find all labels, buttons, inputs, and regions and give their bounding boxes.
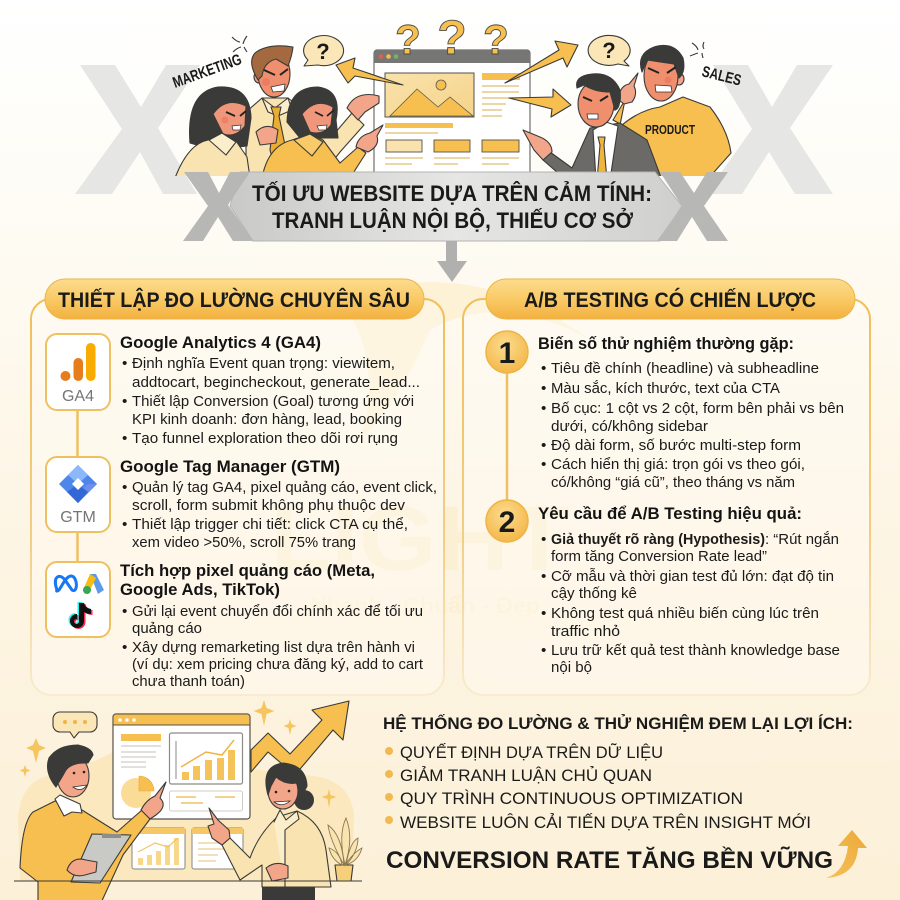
question marks: ?	[395, 16, 421, 63]
heading pill	[486, 279, 855, 319]
icon: dark X right	[657, 172, 728, 241]
benefit bullets: QUYẾT ĐỊNH DỰA TRÊN DỮ LIỆU	[400, 743, 663, 762]
block: GA4 text: •	[122, 393, 127, 410]
person: product man: PRODUCT	[645, 122, 695, 137]
small chart card	[132, 828, 185, 869]
panel frame	[31, 299, 444, 695]
block: GTM text: •	[122, 479, 127, 496]
block: GA4 text: Tạo funnel exploration theo dõi rơi rụng	[132, 430, 398, 447]
browser window	[374, 50, 530, 185]
illustration: team reviewing data	[14, 700, 362, 900]
icon: GTM	[46, 457, 110, 532]
person: product man	[613, 45, 731, 180]
question marks: ?	[437, 12, 467, 65]
block: requirements: Không test quá nhiều biến cùng lúc trên	[551, 605, 819, 622]
small list card	[192, 828, 243, 869]
person: woman presenter	[208, 763, 331, 900]
icon: GA4: GA4	[62, 388, 94, 405]
block: pixel text: quảng cáo	[132, 620, 202, 637]
person: woman left	[175, 87, 251, 178]
block: variables: Biến số thử nghiệm thường gặp:	[538, 334, 794, 353]
block: GA4 text: Google Analytics 4 (GA4)	[120, 333, 321, 352]
sparkles	[20, 700, 336, 808]
block: variables: •	[541, 456, 546, 473]
person: woman middle	[262, 87, 383, 178]
block: variables: Độ dài form, số bước multi-step form	[551, 437, 801, 454]
block: GTM text: Quản lý tag GA4, pixel quảng cáo, event click,	[132, 479, 437, 496]
heading text: THIẾT LẬP ĐO LƯỜNG CHUYÊN SÂU	[58, 288, 410, 312]
connector line	[506, 372, 508, 500]
block: pixel text: (ví dụ: xem pricing chưa đăng ký, add to cart	[132, 656, 424, 673]
floor line	[14, 880, 362, 882]
block: GA4 text: •	[122, 430, 127, 447]
person: marketing man	[246, 46, 379, 178]
number 2: 2	[499, 506, 515, 539]
speech bubble	[53, 712, 97, 738]
faint watermark logo	[270, 282, 590, 618]
benefit bullets	[385, 743, 811, 832]
block: requirements: traffic nhỏ	[551, 623, 620, 640]
block: GA4 text: Thiết lập Conversion (Goal) tương ứng với	[132, 393, 414, 410]
block: requirements: •	[541, 568, 546, 585]
block: variables: •	[541, 360, 546, 377]
block: GTM text: xem video >50%, scroll 75% trang	[132, 534, 356, 551]
block: requirements: form tăng Conversion Rate lead”	[551, 548, 767, 565]
block: requirements: cậy thống kê	[551, 585, 637, 602]
block: pixel text	[120, 561, 424, 690]
speech bubble right	[588, 35, 630, 66]
block: variables: •	[541, 400, 546, 417]
speech bubble right: ?	[602, 38, 616, 63]
block: GA4 text: addtocart, begincheckout, generate_lead...	[132, 374, 420, 391]
block: GA4 text	[120, 333, 420, 447]
question marks	[396, 20, 507, 54]
block: pixel text: Xây dựng remarketing list dựa trên hành vi	[132, 639, 415, 656]
block: GA4 text: Định nghĩa Event quan trọng: viewitem,	[132, 355, 395, 372]
number 1: 1	[499, 337, 515, 370]
title line 1: TỐI ƯU WEBSITE DỰA TRÊN CẢM TÍNH:	[252, 180, 652, 206]
block: variables: Màu sắc, kích thước, text của CTA	[551, 380, 781, 397]
number 2	[486, 500, 528, 542]
block: GTM text	[120, 457, 437, 551]
benefit bullets: WEBSITE LUÔN CẢI TIẾN DỰA TRÊN INSIGHT MỚI	[400, 813, 811, 832]
faint watermark logo: LIGHT	[270, 488, 570, 590]
conclusion: CONVERSION RATE TĂNG BỀN VỮNG	[386, 846, 833, 874]
anger mark left	[232, 36, 247, 52]
connector lines	[76, 410, 79, 562]
arrow: lower right	[509, 89, 571, 117]
block: GA4 text: •	[122, 355, 127, 372]
block: variables: Tiêu đề chính (headline) và subheadline	[551, 360, 819, 377]
arrow: curved up	[826, 830, 867, 878]
panel: A/B testing	[463, 279, 870, 695]
title line 2: TRANH LUẬN NỘI BỘ, THIẾU CƠ SỞ	[272, 208, 633, 233]
icon: GTM: GTM	[60, 509, 96, 526]
block: requirements: : “Rút ngắn	[765, 531, 839, 548]
block: variables: •	[541, 380, 546, 397]
icon: big light X right	[706, 65, 833, 194]
arrow: upper right	[505, 41, 578, 83]
block: requirements: •	[541, 531, 546, 548]
icon: big light X left	[75, 65, 200, 194]
block: pixel text: •	[122, 639, 127, 656]
arrow: down	[437, 241, 467, 282]
faint watermark logo: Nhanh - Chuẩn - Đẹp	[310, 593, 540, 618]
block: variables: dưới, có/không sidebar	[551, 418, 708, 435]
icon: GA4	[46, 334, 110, 410]
dashboard window	[113, 714, 250, 819]
block: requirements: Cỡ mẫu và thời gian test đủ lớn: đạt độ tin	[551, 568, 834, 585]
panel frame	[463, 299, 870, 695]
block: pixel text: Tích hợp pixel quảng cáo (Meta,	[120, 561, 375, 580]
block: pixel text: Gửi lại event chuyển đổi chính xác để tối ưu	[132, 603, 423, 620]
block: pixel text: chưa thanh toán)	[132, 673, 245, 690]
block: benefits	[383, 713, 853, 874]
block: variables: •	[541, 437, 546, 454]
question marks: ?	[483, 16, 509, 63]
icon: dark X left	[183, 172, 253, 241]
arrow: to left bubble	[336, 58, 403, 85]
illustration: team arguing about website	[171, 12, 743, 185]
block: variables: Cách hiển thị giá: trọn gói vs theo gói,	[551, 456, 805, 473]
panel: measurement	[31, 279, 444, 695]
person: man with clipboard	[20, 745, 166, 900]
speech bubble left	[304, 36, 344, 66]
block: requirements: Lưu trữ kết quả test thành knowledge base	[551, 642, 840, 659]
block: variables: có/không “giá cũ”, theo tháng vs năm	[551, 474, 795, 491]
block: variables: Bố cục: 1 cột vs 2 cột, form bên phải vs bên	[551, 400, 844, 417]
benefit bullets: GIẢM TRANH LUẬN CHỦ QUAN	[400, 766, 652, 785]
heading pill	[45, 279, 424, 319]
block: requirements	[538, 504, 840, 676]
label: sales: SALES	[700, 63, 743, 90]
block: requirements: •	[541, 642, 546, 659]
block: pixel text: •	[122, 603, 127, 620]
icon: ad pixels	[46, 562, 110, 637]
title banner	[183, 172, 728, 241]
label: marketing: MARKETING	[171, 51, 244, 92]
benefit bullets: QUY TRÌNH CONTINUOUS OPTIMIZATION	[400, 789, 743, 808]
block: GTM text: •	[122, 516, 127, 533]
block: GTM text: scroll, form submit không phụ thuộc dev	[132, 497, 405, 514]
block: variables	[538, 334, 844, 491]
block: GA4 text: KPI kinh doanh: đơn hàng, lead, booking	[132, 411, 402, 428]
background blob	[18, 752, 354, 881]
plant	[328, 818, 362, 881]
speech bubble left: ?	[316, 39, 330, 64]
block: pixel text: Google Ads, TikTok)	[120, 580, 280, 599]
anger mark right	[690, 42, 704, 58]
block: GTM text: Google Tag Manager (GTM)	[120, 457, 340, 476]
banner body	[230, 172, 682, 241]
person: suit man	[523, 74, 662, 180]
block: requirements: •	[541, 605, 546, 622]
number 1	[486, 331, 528, 373]
benefits heading: HỆ THỐNG ĐO LƯỜNG & THỬ NGHIỆM ĐEM LẠI LỢI ÍCH:	[383, 713, 853, 733]
heading text: A/B TESTING CÓ CHIẾN LƯỢC	[524, 288, 816, 312]
block: requirements: Giả thuyết rõ ràng (Hypothesis)	[551, 531, 765, 548]
block: GTM text: Thiết lập trigger chi tiết: click CTA cụ thể,	[132, 516, 408, 533]
block: requirements: Yêu cầu để A/B Testing hiệu quả:	[538, 504, 802, 523]
growth arrow	[251, 701, 349, 775]
block: requirements: nội bộ	[551, 659, 592, 676]
